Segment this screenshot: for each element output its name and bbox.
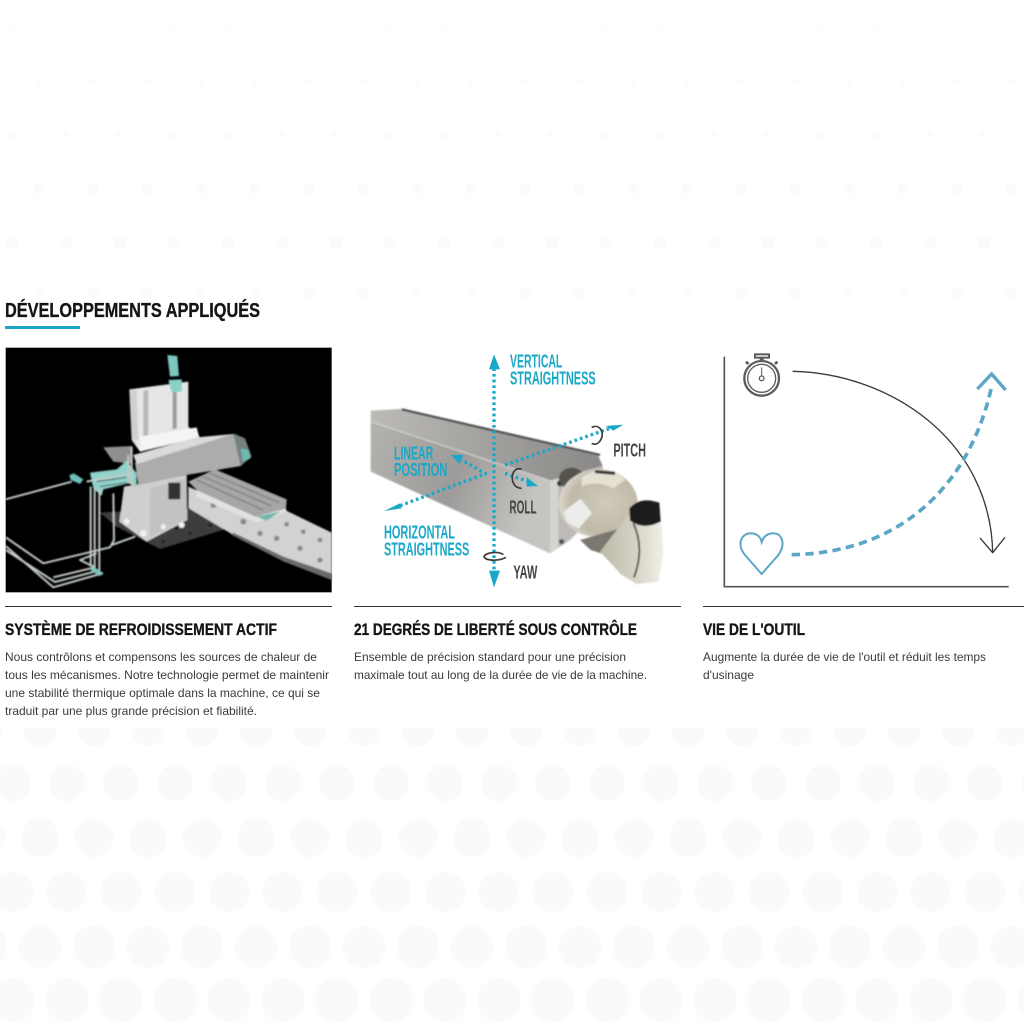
title: DÉVELOPPEMENTS APPLIQUÉS <box>5 299 260 322</box>
diagram: beam with axes <box>371 350 663 587</box>
text block: maximale tout au long de la durée de vie de la machine. <box>354 668 647 682</box>
text block: Nous contrôlons et compensons les sources de chaleur de <box>5 650 317 664</box>
image: machine on black background <box>6 348 332 592</box>
crossbeam <box>103 446 132 464</box>
beam <box>371 422 550 553</box>
diagram: beam with axes: PITCH <box>613 440 646 461</box>
divider and heading: SYSTÈME DE REFROIDISSEMENT ACTIF <box>5 620 277 639</box>
panel: 21 degrees of freedom <box>354 350 681 682</box>
text block <box>354 650 647 682</box>
milling head <box>559 468 584 489</box>
divider and heading: VIE DE L'OUTIL <box>703 620 805 639</box>
text block: Ensemble de précision standard pour une précision <box>354 650 626 664</box>
text block <box>703 650 986 682</box>
rotation arcs <box>484 426 602 560</box>
worktable <box>188 469 287 517</box>
text block: d'usinage <box>703 668 754 682</box>
diagram: beam with axes: LINEAR <box>394 442 434 463</box>
axis dashes <box>400 368 610 570</box>
panel: tool life <box>703 354 1024 682</box>
text block: tous les mécanismes. Notre technologie permet de maintenir <box>5 668 329 682</box>
diagram: beam with axes: POSITION <box>394 459 447 480</box>
title <box>5 299 260 329</box>
floor plate <box>100 508 228 549</box>
pipes <box>6 447 135 587</box>
divider and heading: 21 DEGRÉS DE LIBERTÉ SOUS CONTRÔLE <box>354 620 637 639</box>
column base <box>119 475 187 542</box>
chart: tool life and machining time <box>724 354 1009 587</box>
panel: active cooling system <box>5 348 332 718</box>
arrowheads <box>384 354 623 587</box>
axis labels: VERTICAL <box>510 350 562 371</box>
text block: une stabilité thermique optimale dans la machine, ce qui se <box>5 686 320 700</box>
upper column <box>129 382 200 452</box>
teal cooling units <box>167 355 179 377</box>
long bed <box>188 487 332 579</box>
diagram: beam with axes: ROLL <box>509 496 537 517</box>
text block: traduit par une plus grande précision et fiabilité. <box>5 704 257 718</box>
diagram: beam with axes: STRAIGHTNESS <box>384 539 469 560</box>
diagram: beam with axes: HORIZONTAL <box>384 521 455 542</box>
curve: time down <box>793 371 993 552</box>
text block <box>5 650 329 718</box>
diagram: beam with axes: YAW <box>513 561 538 582</box>
curve: tool life up <box>792 385 992 555</box>
arrowhead: tool life <box>977 374 1006 390</box>
text block: Augmente la durée de vie de l'outil et réduit les temps <box>703 650 986 664</box>
axes <box>724 357 1009 587</box>
icon: stopwatch <box>744 354 779 396</box>
icon: heart <box>740 533 782 574</box>
arrowhead: time <box>980 537 1005 553</box>
diagram: beam with axes: STRAIGHTNESS <box>510 367 596 388</box>
